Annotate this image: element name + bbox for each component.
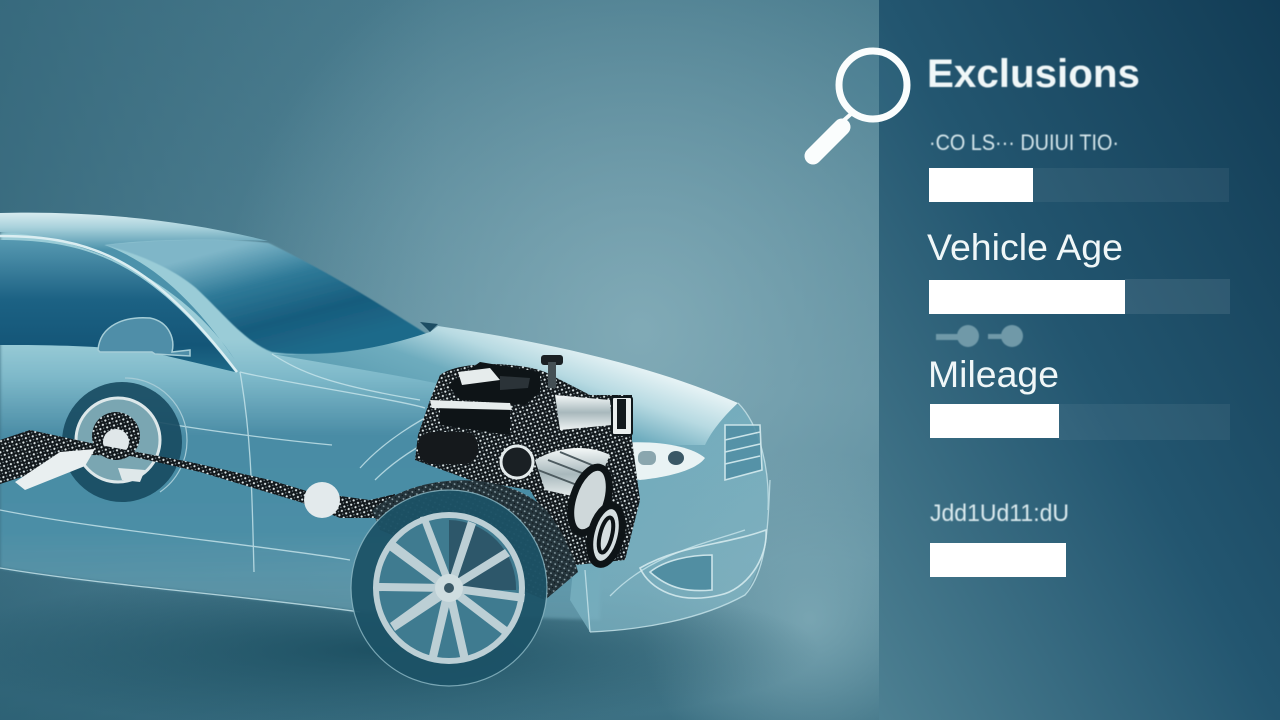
side window	[0, 240, 235, 372]
windshield	[104, 239, 427, 354]
axle and drivetrain	[0, 430, 395, 518]
exclusion item 1: garbled label and bar	[929, 130, 1229, 202]
garbled label: ·CO LS··· DUIUI TIO·	[929, 130, 1119, 155]
roof	[0, 213, 268, 360]
decorative glyph: dots	[936, 325, 1023, 347]
car body	[0, 228, 600, 620]
progress fill	[929, 280, 1125, 314]
engine	[415, 355, 640, 568]
body lines	[0, 354, 770, 632]
exclusion item 2: Vehicle Age	[927, 227, 1230, 314]
side panel	[879, 0, 1280, 720]
rear wheel	[62, 378, 187, 502]
progress fill	[930, 404, 1059, 438]
heading: Exclusions: Exclusions	[927, 52, 1140, 96]
label: Vehicle Age	[927, 227, 1123, 268]
front wheel	[351, 480, 578, 686]
garbled label: Jdd1Ud11:dU	[930, 500, 1069, 527]
progress track	[1033, 168, 1229, 202]
label: Mileage	[928, 354, 1059, 395]
nose and bumper	[570, 400, 768, 632]
progress fill	[929, 168, 1033, 202]
icon: magnifying glass	[813, 51, 907, 156]
grille and lower intake	[640, 425, 766, 598]
exclusion item 4: garbled label and bar	[930, 500, 1069, 577]
hood	[272, 326, 738, 445]
headlight	[600, 442, 705, 480]
car illustration	[0, 213, 770, 686]
progress track	[1059, 404, 1230, 440]
exclusion item 3: Mileage	[928, 354, 1230, 440]
progress fill	[930, 543, 1066, 577]
progress track	[1125, 279, 1230, 314]
window trim	[0, 236, 237, 372]
door mirror	[98, 318, 190, 356]
